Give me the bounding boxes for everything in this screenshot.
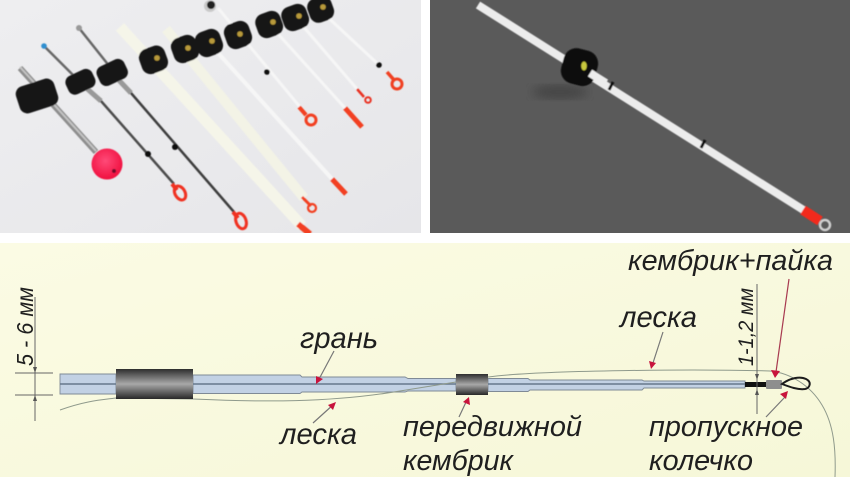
label: передвижной кембрик [403,397,582,477]
solder sleeve and eyelet [766,378,810,389]
nod 1: steel with red ball [14,67,122,180]
white nods [120,0,402,234]
fixed black sleeve [116,369,193,399]
label: передвижной кембрик: передвижной [403,411,582,443]
nod 3: thin steel with grey tip [76,25,248,230]
label: кембрик+пайка [628,245,833,378]
panel: photo of single white nod on grey [430,0,850,233]
black sliders with gold dots [136,0,337,77]
dimension 5-6 mm: 5 - 6 мм [12,287,38,366]
shadow under slider [532,85,588,99]
label: леска lower [278,402,357,451]
fishing line [60,370,835,477]
label: пропускное колечко [649,391,803,477]
black rings on strip [609,82,613,90]
dimension 1-1.2 mm [735,284,759,414]
label: пропускное колечко: пропускное [649,411,803,443]
dimension 5-6 mm [12,287,53,421]
label: грань: грань [300,322,378,355]
label: леска upper: леска [618,301,697,334]
label: леска upper [618,301,697,369]
nod body [60,374,766,394]
white nod strip [478,5,805,211]
movable sleeve [456,374,488,395]
nod 2: thin steel with blue tip [41,43,188,202]
label: грань [300,322,378,384]
black slider [558,45,606,89]
label: пропускное колечко: колечко [649,445,753,477]
panel: nod diagram [0,243,850,477]
panel: photo of white and metal nods [0,0,421,234]
red tip and ring [803,210,830,230]
label: кембрик+пайка: кембрик+пайка [628,245,833,277]
dimension 1-1.2 mm: 1-1,2 мм [735,288,758,366]
label: передвижной кембрик: кембрик [403,445,514,477]
label: леска lower: леска [278,418,357,451]
